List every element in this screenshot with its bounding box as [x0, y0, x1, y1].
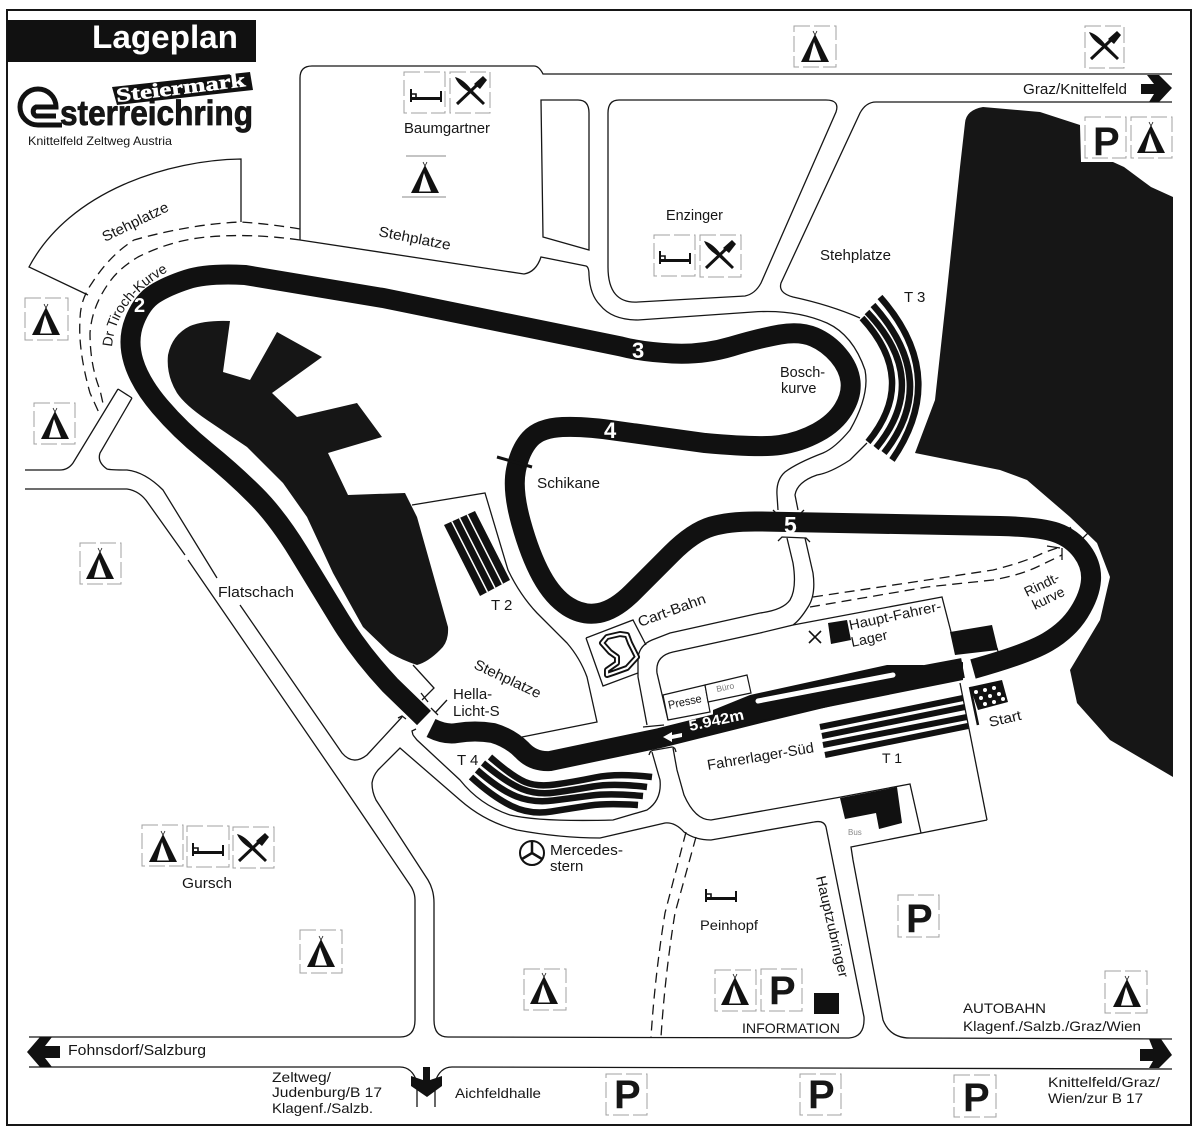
icon: parking east: P: [906, 897, 933, 941]
building: Presse: [663, 685, 710, 720]
icon: tent lower left: [300, 930, 342, 973]
label: Stehplatze centre: Stehplatze: [471, 657, 543, 702]
label: Stehplatze north-east: Stehplatze: [820, 248, 891, 264]
label: Schikane: Schikane: [537, 476, 600, 492]
label: Gursch: Gursch: [182, 875, 232, 892]
logo: Steiermark Österreichring: [20, 69, 253, 148]
icon: bed Peinhopf: [706, 889, 736, 902]
label: Dr Tiroch-Kurve: Dr Tiroch-Kurve: [102, 266, 166, 346]
icon: tent Autobahn: [1105, 971, 1147, 1013]
label: Zeltweg/Judenburg/Klagenfurt: Klagenf./Salzb.: [272, 1100, 373, 1116]
icon: bed Gursch: [187, 826, 229, 867]
icon: parking bottom 1: [606, 1073, 647, 1117]
label: Cart-Bahn: Cart-Bahn: [636, 591, 708, 631]
label: Hella-Licht-S: Hella-: [453, 686, 492, 703]
label: Hauptzubringer: Hauptzubringer: [813, 874, 852, 979]
corner number 3: 3: [632, 338, 644, 363]
label: Start: Start: [987, 707, 1023, 730]
icon: parking bottom 1: P: [614, 1073, 641, 1117]
track: main lap: [130, 275, 1091, 718]
pit lane: [713, 662, 963, 730]
icon: tent lower centre: [524, 969, 566, 1010]
label: Haupt-Fahrer-Lager: [847, 598, 943, 650]
label: Rindtkurve: kurve: [1029, 583, 1067, 613]
logo wordmark: sterreichring: [60, 94, 253, 133]
icon: tent Baumgartner: [402, 156, 446, 197]
icon: parking bottom 2: P: [808, 1073, 835, 1117]
Cart-Bahn mini track: [602, 634, 637, 675]
logo mark: stylised O: [20, 89, 62, 125]
label: Zeltweg/Judenburg/Klagenfurt: Zeltweg/: [272, 1069, 331, 1085]
label: Zeltweg/Judenburg/Klagenfurt: [272, 1069, 382, 1116]
icon: parking bottom 2: [800, 1073, 841, 1117]
label: Autobahn destinations: AUTOBAHN: [963, 1000, 1046, 1016]
Haupt-Fahrer-Lager marker: [809, 620, 851, 644]
icon: parking top right: [1085, 117, 1126, 164]
track length label: [663, 707, 746, 742]
label: Fohnsdorf/Salzburg: Fohnsdorf/Salzburg: [68, 1043, 206, 1059]
label: Baumgartner: Baumgartner: [404, 121, 490, 137]
Schikane marker: [497, 457, 532, 467]
icon: parking bottom 3: [954, 1075, 996, 1120]
racing circuit: [130, 275, 1091, 761]
label: Autobahn destinations: [963, 1000, 1141, 1034]
label: Boschkurve: kurve: [781, 381, 816, 397]
label: Knittelfeld/Graz/Wien: [1048, 1074, 1160, 1106]
icon: tent Gursch: [142, 825, 183, 866]
label T 3: T 3: [904, 289, 925, 306]
logo banner: Steiermark: Steiermark: [115, 69, 248, 107]
arrow: to Graz/Knittelfeld: [1141, 75, 1172, 102]
label: Stehplatze north: Stehplatze: [377, 224, 452, 254]
label T 1: T 1: [882, 750, 902, 766]
label: Mercedes-stern: stern: [550, 858, 583, 875]
label: Flatschach: Flatschach: [218, 584, 294, 601]
label: Stehplatze north-west: Stehplatze: [100, 200, 171, 246]
label T 2: T 2: [491, 597, 512, 614]
track length label: 5.942m: [687, 707, 746, 735]
icon: tent left 2: [34, 403, 75, 444]
icon: tent left 1: [25, 298, 68, 340]
icon: tent left 3: [80, 543, 121, 584]
building: Büro: Büro: [715, 680, 735, 694]
forest: east of the circuit: [915, 107, 1173, 777]
label: Zeltweg/Judenburg/Klagenfurt: Judenburg/B 17: [272, 1084, 382, 1100]
icon: bed Enzinger: [654, 235, 695, 276]
arrow: to Zeltweg/Judenburg: [411, 1067, 442, 1097]
label: Knittelfeld/Graz/Wien: Knittelfeld/Graz/: [1048, 1074, 1160, 1090]
icon: fork Gursch: [233, 827, 274, 868]
arrow: to Fohnsdorf/Salzburg: [27, 1037, 60, 1067]
label: INFORMATION: INFORMATION: [742, 1020, 840, 1036]
icon: tent top centre: [794, 26, 836, 67]
label: Haupt-Fahrer-Lager: Lager: [849, 627, 889, 650]
corner number 2: 2: [134, 295, 145, 317]
logo banner: Steiermark: [112, 69, 253, 107]
building: Bus: Bus: [848, 828, 862, 837]
title: Lageplan: Lageplan: [92, 19, 238, 55]
corner number 4: 4: [604, 418, 617, 443]
logo tagline: Knittelfeld Zeltweg Austria: [28, 134, 172, 148]
forest: west of the circuit: [168, 321, 448, 665]
icon: information square: [814, 993, 839, 1014]
pit lane slit: [758, 675, 893, 701]
label: Graz/Knittelfeld: Graz/Knittelfeld: [1023, 82, 1127, 98]
label: Mercedes-stern: Mercedes-: [550, 842, 623, 859]
arrow: to Knittelfeld/Graz: [1140, 1039, 1172, 1068]
label: Rindtkurve: [1021, 569, 1067, 613]
dashed access paths: [80, 222, 1062, 1037]
icon: parking Peinhopf: P: [769, 969, 796, 1013]
label: Hella-Licht-S: Licht-S: [453, 703, 500, 720]
start flag: [970, 680, 1008, 725]
building: Bus: [840, 787, 902, 837]
building near Rindtkurve: [950, 625, 998, 655]
label: Rindtkurve: Rindt-: [1021, 569, 1062, 600]
icon: fork Baumgartner: [450, 72, 490, 113]
label: Enzinger: Enzinger: [666, 208, 723, 224]
label: Boschkurve: Bosch-: [780, 365, 825, 381]
icon: tent top right: [1131, 117, 1172, 158]
label T 4: T 4: [457, 752, 478, 769]
grandstand T1: [820, 698, 968, 766]
grandstand T3: [862, 289, 925, 460]
icon: bed Baumgartner: [404, 72, 445, 113]
corner number 5: 5: [784, 512, 797, 538]
label: Haupt-Fahrer-Lager: Haupt-Fahrer-: [847, 598, 943, 633]
icon: parking bottom 3: P: [963, 1076, 990, 1120]
icon: fork top right: [1085, 26, 1124, 68]
icon: parking east: [898, 895, 939, 941]
icon: parking Peinhopf: [761, 969, 802, 1013]
label: Autobahn destinations: Klagenf./Salzb./Graz/Wien: [963, 1018, 1141, 1034]
label: Peinhopf: Peinhopf: [700, 917, 758, 933]
building: Büro: [705, 675, 751, 702]
icon: Mercedes star: [520, 841, 544, 865]
label: Knittelfeld/Graz/Wien: Wien/zur B 17: [1048, 1090, 1143, 1106]
title: Lageplan: [7, 19, 256, 62]
track: Hella-Licht-S and start straight: [431, 668, 963, 761]
icon: fork Enzinger: [700, 235, 741, 277]
icon: parking top right: P: [1093, 120, 1120, 164]
building: Presse: Presse: [667, 693, 703, 712]
grandstand T4: [457, 752, 652, 812]
label: Fahrerlager-Süd: Fahrerlager-Süd: [706, 740, 815, 774]
grandstand T2: [444, 511, 512, 614]
label: Aichfeldhalle: Aichfeldhalle: [455, 1085, 541, 1101]
icon: tent Peinhopf: [715, 970, 756, 1011]
